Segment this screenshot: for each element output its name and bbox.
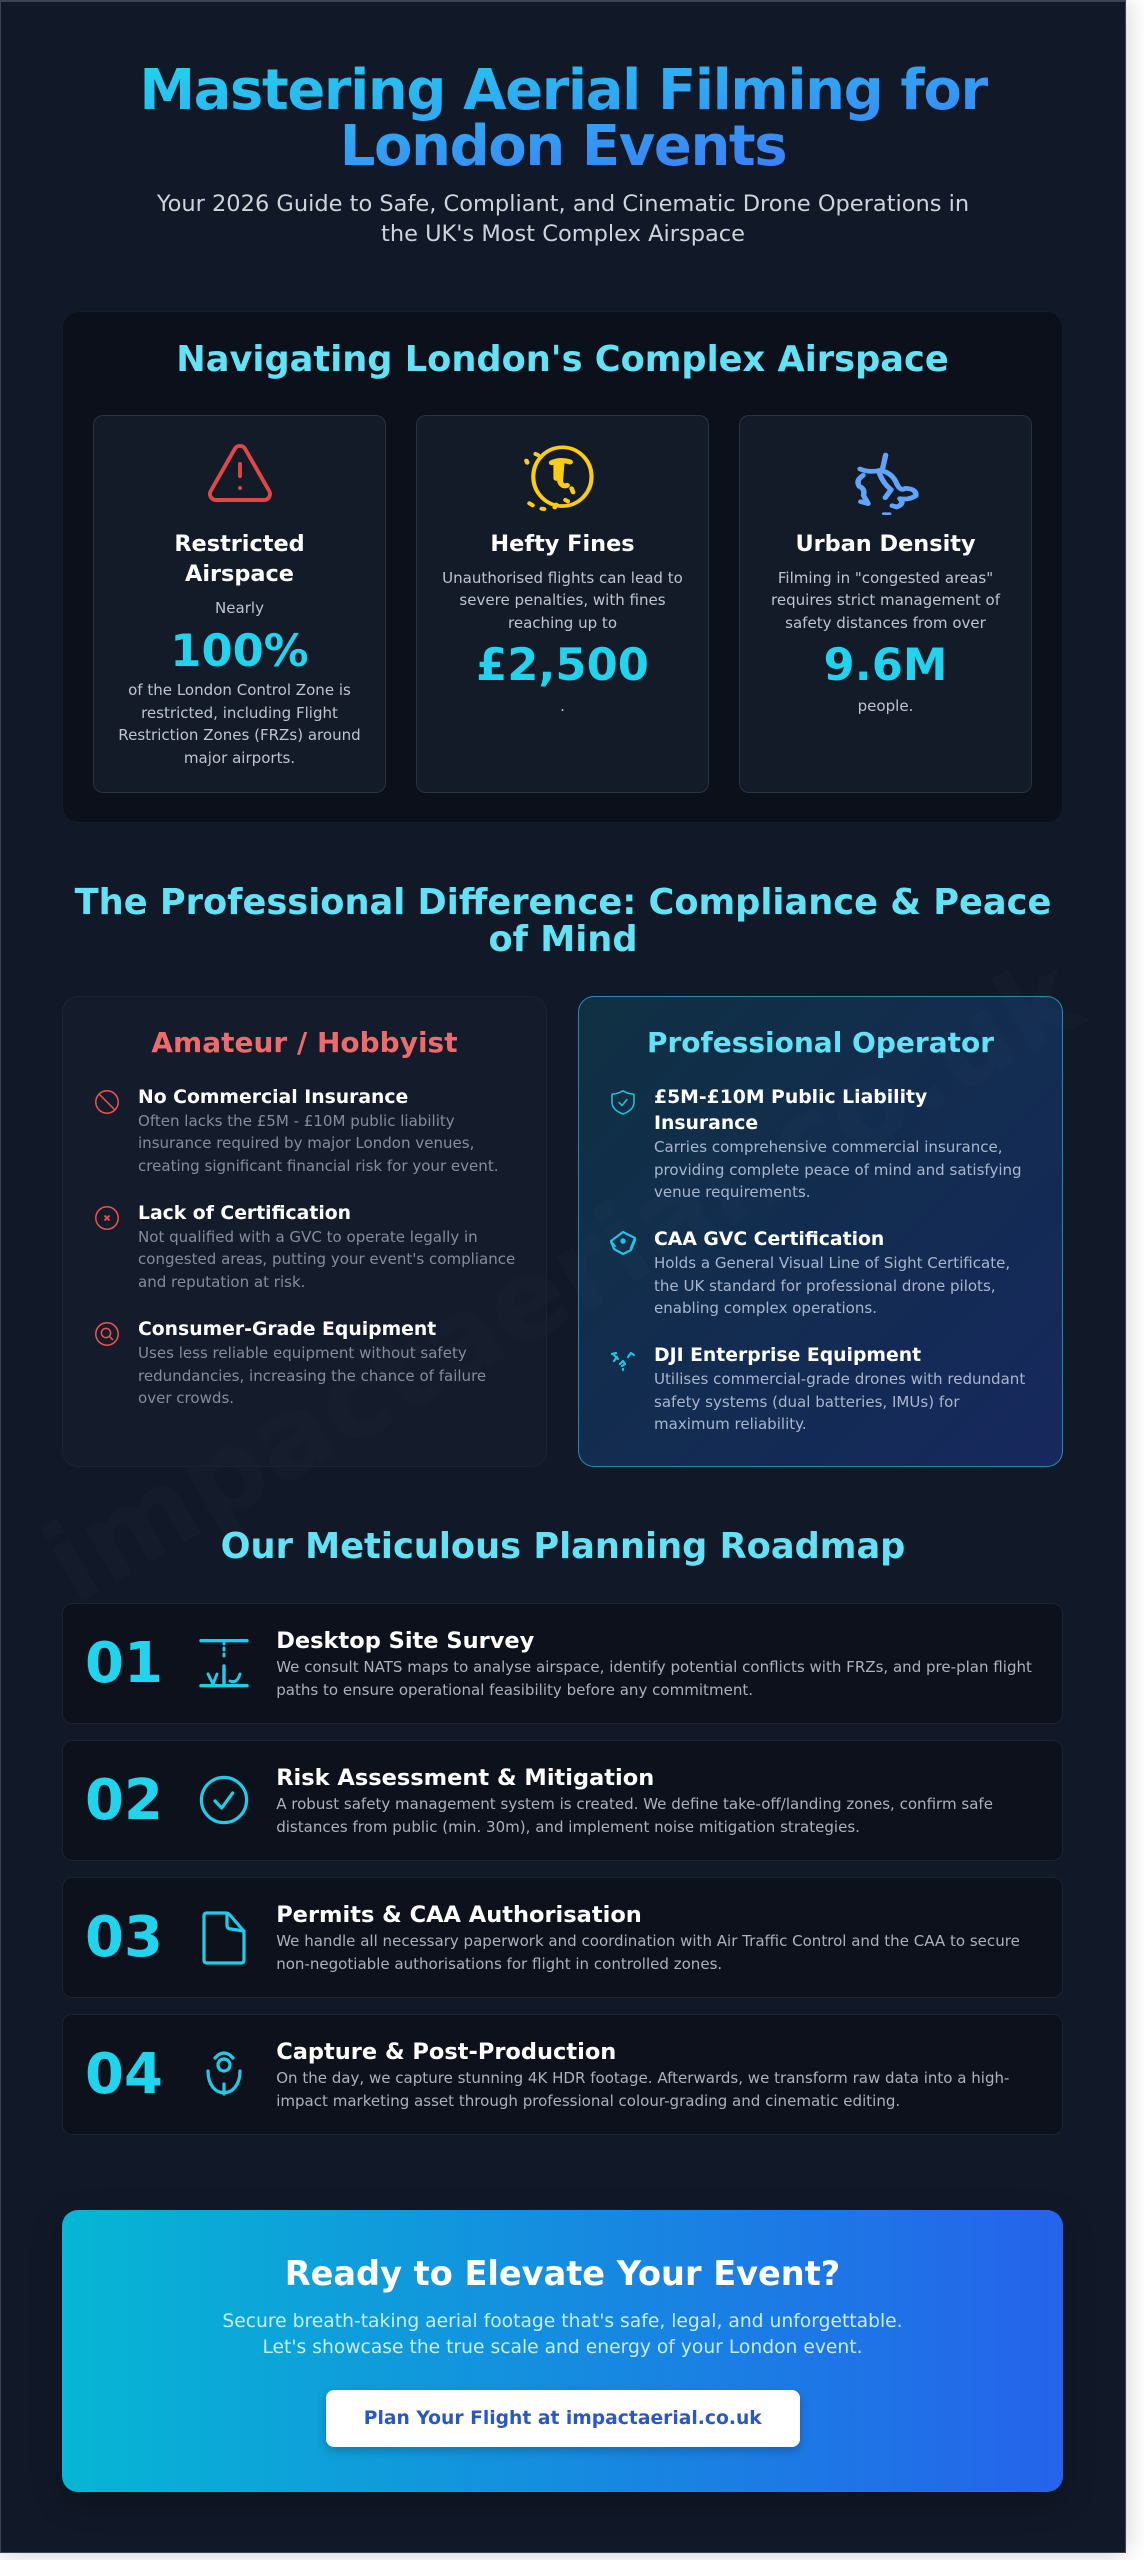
step number: 03 — [85, 1905, 163, 1970]
watermark: impactaerial.co.uk — [23, 931, 1103, 1629]
description: safety distances from over — [785, 614, 986, 632]
step text: We consult NATS maps to analyse airspace, identify potential conflicts with FRZs, and pre-plan flight — [276, 1658, 1032, 1676]
panel: airspace — [62, 311, 1063, 823]
item title: £5M-£10M Public Liability — [654, 1087, 927, 1108]
description: restricted, including Flight — [141, 704, 338, 722]
amateur heading: Amateur / Hobbyist — [151, 1026, 458, 1059]
step title: Desktop Site Survey — [276, 1628, 534, 1654]
item text — [654, 1138, 1022, 1201]
icon: check circle — [200, 1776, 248, 1824]
item title: Insurance — [654, 1113, 758, 1134]
icon: certificate — [610, 1230, 636, 1256]
panel: roadmap steps — [62, 1603, 1063, 2135]
item text: Often lacks the £5M - £10M public liability — [138, 1112, 455, 1130]
item title — [654, 1087, 927, 1134]
item text: Holds a General Visual Line of Sight Certificate, — [654, 1254, 1010, 1272]
title: Mastering Aerial Filming for — [139, 58, 987, 123]
heading: roadmap: Our Meticulous Planning Roadmap — [221, 1526, 905, 1567]
step text — [276, 2067, 1009, 2112]
step text — [276, 1932, 1020, 1973]
item title: No Commercial Insurance — [138, 1087, 408, 1108]
item text: congested areas, putting your event's compliance — [138, 1250, 515, 1268]
step title: Permits & CAA Authorisation — [276, 1902, 642, 1928]
item text: providing complete peace of mind and satisfying — [654, 1161, 1022, 1179]
step text: impact marketing asset through professional colour-grading and cinematic editing. — [276, 2092, 900, 2110]
description: Unauthorised flights can lead to — [442, 569, 683, 587]
description — [442, 569, 683, 632]
item text — [138, 1344, 486, 1407]
item text: the UK standard for professional drone pilots, — [654, 1276, 996, 1294]
panel: comparison — [62, 996, 1063, 1467]
heading: professional difference: The Professional Difference: Compliance & Peace — [75, 882, 1051, 922]
trailing text: . — [560, 697, 565, 715]
step text — [276, 1658, 1032, 1699]
lead-in: Nearly — [215, 599, 264, 617]
card title: Airspace — [185, 561, 294, 587]
item text: over crowds. — [138, 1389, 234, 1407]
professional heading: Professional Operator — [647, 1026, 994, 1059]
step number: 01 — [85, 1631, 163, 1696]
stat: 100%: 100% — [170, 624, 309, 676]
description: severe penalties, with fines — [459, 591, 666, 609]
step text: paths to ensure operational feasibility before any commitment. — [276, 1681, 753, 1699]
step 03 — [62, 1877, 1063, 1998]
item: CAA certification — [610, 1229, 1010, 1317]
item text — [138, 1228, 515, 1291]
step text: non-negotiable authorisations for flight in controlled zones. — [276, 1955, 722, 1973]
item text — [654, 1254, 1010, 1317]
item text: Uses less reliable equipment without safety — [138, 1344, 467, 1362]
icon: shield check — [611, 1090, 635, 1115]
card: urban density — [739, 415, 1032, 793]
CTA heading: Ready to Elevate Your Event? — [285, 2254, 840, 2292]
icon: document — [202, 1911, 246, 1965]
item: DJI equipment — [610, 1345, 1025, 1433]
description — [771, 569, 1000, 632]
card: hefty fines — [416, 415, 709, 793]
item: no insurance — [95, 1087, 499, 1175]
description: Filming in "congested areas" — [778, 569, 993, 587]
card title: Restricted — [174, 531, 305, 557]
step text: distances from public (min. 30m), and implement noise mitigation strategies. — [276, 1818, 860, 1836]
item: no certification — [95, 1203, 515, 1291]
item text: Carries comprehensive commercial insurance, — [654, 1138, 1003, 1156]
card: restricted airspace — [93, 415, 386, 793]
card: amateur — [62, 996, 547, 1467]
icon: capture — [200, 2050, 248, 2098]
card: professional — [578, 996, 1063, 1467]
item text: safety systems (dual batteries, IMUs) for — [654, 1392, 960, 1410]
subtitle — [156, 191, 969, 247]
item text: venue requirements. — [654, 1183, 811, 1201]
description: Restriction Zones (FRZs) around — [118, 726, 361, 744]
card title: Urban Density — [795, 531, 976, 557]
item text: maximum reliability. — [654, 1415, 807, 1433]
item title: Consumer-Grade Equipment — [138, 1319, 436, 1340]
step title: Capture & Post-Production — [276, 2038, 616, 2064]
icon: x circle — [95, 1206, 119, 1230]
step title: Risk Assessment & Mitigation — [276, 1764, 654, 1790]
item text: Not qualified with a GVC to operate legally in — [138, 1228, 478, 1246]
item text: redundancies, increasing the chance of failure — [138, 1366, 486, 1384]
step text: A robust safety management system is created. We define take-off/landing zones, confirm safe — [276, 1795, 993, 1813]
icon: broken coin — [524, 446, 594, 511]
icon: drone fragments — [610, 1352, 636, 1372]
item title: CAA GVC Certification — [654, 1229, 884, 1250]
step 02 — [62, 1740, 1063, 1861]
step 01 — [62, 1603, 1063, 1724]
stat: £2,500: £2,500 — [476, 638, 649, 690]
heading: airspace: Navigating London's Complex Airspace — [176, 339, 949, 380]
icon: survey — [199, 1639, 249, 1688]
stat: 9.6M: 9.6M — [824, 638, 947, 690]
CTA text: Secure breath-taking aerial footage that's safe, legal, and unforgettable. — [222, 2311, 903, 2332]
item text — [654, 1370, 1025, 1433]
title — [138, 63, 988, 175]
step text — [276, 1795, 993, 1836]
subtitle: the UK's Most Complex Airspace — [381, 221, 745, 247]
icon: search circle — [95, 1322, 119, 1346]
icon: ban — [95, 1090, 119, 1114]
item title: Lack of Certification — [138, 1203, 351, 1224]
CTA text — [62, 2309, 1063, 2361]
item: public liability — [611, 1087, 1022, 1201]
description: reaching up to — [508, 614, 617, 632]
step number: 04 — [85, 2042, 163, 2107]
CTA button: Plan Your Flight at impactaerial.co.uk — [364, 2408, 762, 2429]
title: London Events — [340, 114, 786, 179]
description — [118, 681, 361, 767]
trailing text: people. — [858, 697, 913, 715]
CTA text: Let's showcase the true scale and energy of your London event. — [262, 2337, 863, 2358]
icon: warning triangle — [208, 444, 272, 502]
item: consumer equipment — [95, 1319, 486, 1407]
card title: Hefty Fines — [490, 531, 635, 557]
panel: call to action — [62, 2210, 1063, 2492]
subtitle: Your 2026 Guide to Safe, Compliant, and Cinematic Drone Operations in — [157, 191, 969, 217]
step number: 02 — [85, 1768, 163, 1833]
item text: and reputation at risk. — [138, 1273, 305, 1291]
item title: DJI Enterprise Equipment — [654, 1345, 921, 1366]
item text — [138, 1112, 499, 1175]
item text: Utilises commercial-grade drones with redundant — [654, 1370, 1025, 1388]
item text: enabling complex operations. — [654, 1299, 877, 1317]
item text: creating significant financial risk for your event. — [138, 1157, 499, 1175]
CTA button — [326, 2390, 800, 2447]
card title — [174, 531, 305, 587]
step text: We handle all necessary paperwork and coordination with Air Traffic Control and the CAA to secure — [276, 1932, 1020, 1950]
step text: On the day, we capture stunning 4K HDR footage. Afterwards, we transform raw data into a high- — [276, 2069, 1009, 2087]
description: of the London Control Zone is — [128, 681, 351, 699]
heading: professional difference: of Mind — [488, 919, 638, 960]
description: major airports. — [184, 749, 295, 767]
description: requires strict management of — [771, 591, 1000, 609]
heading: professional difference — [74, 882, 1051, 960]
step 04 — [62, 2014, 1063, 2135]
icon: urban density — [855, 452, 919, 515]
item text: insurance required by major London venues, — [138, 1134, 474, 1152]
